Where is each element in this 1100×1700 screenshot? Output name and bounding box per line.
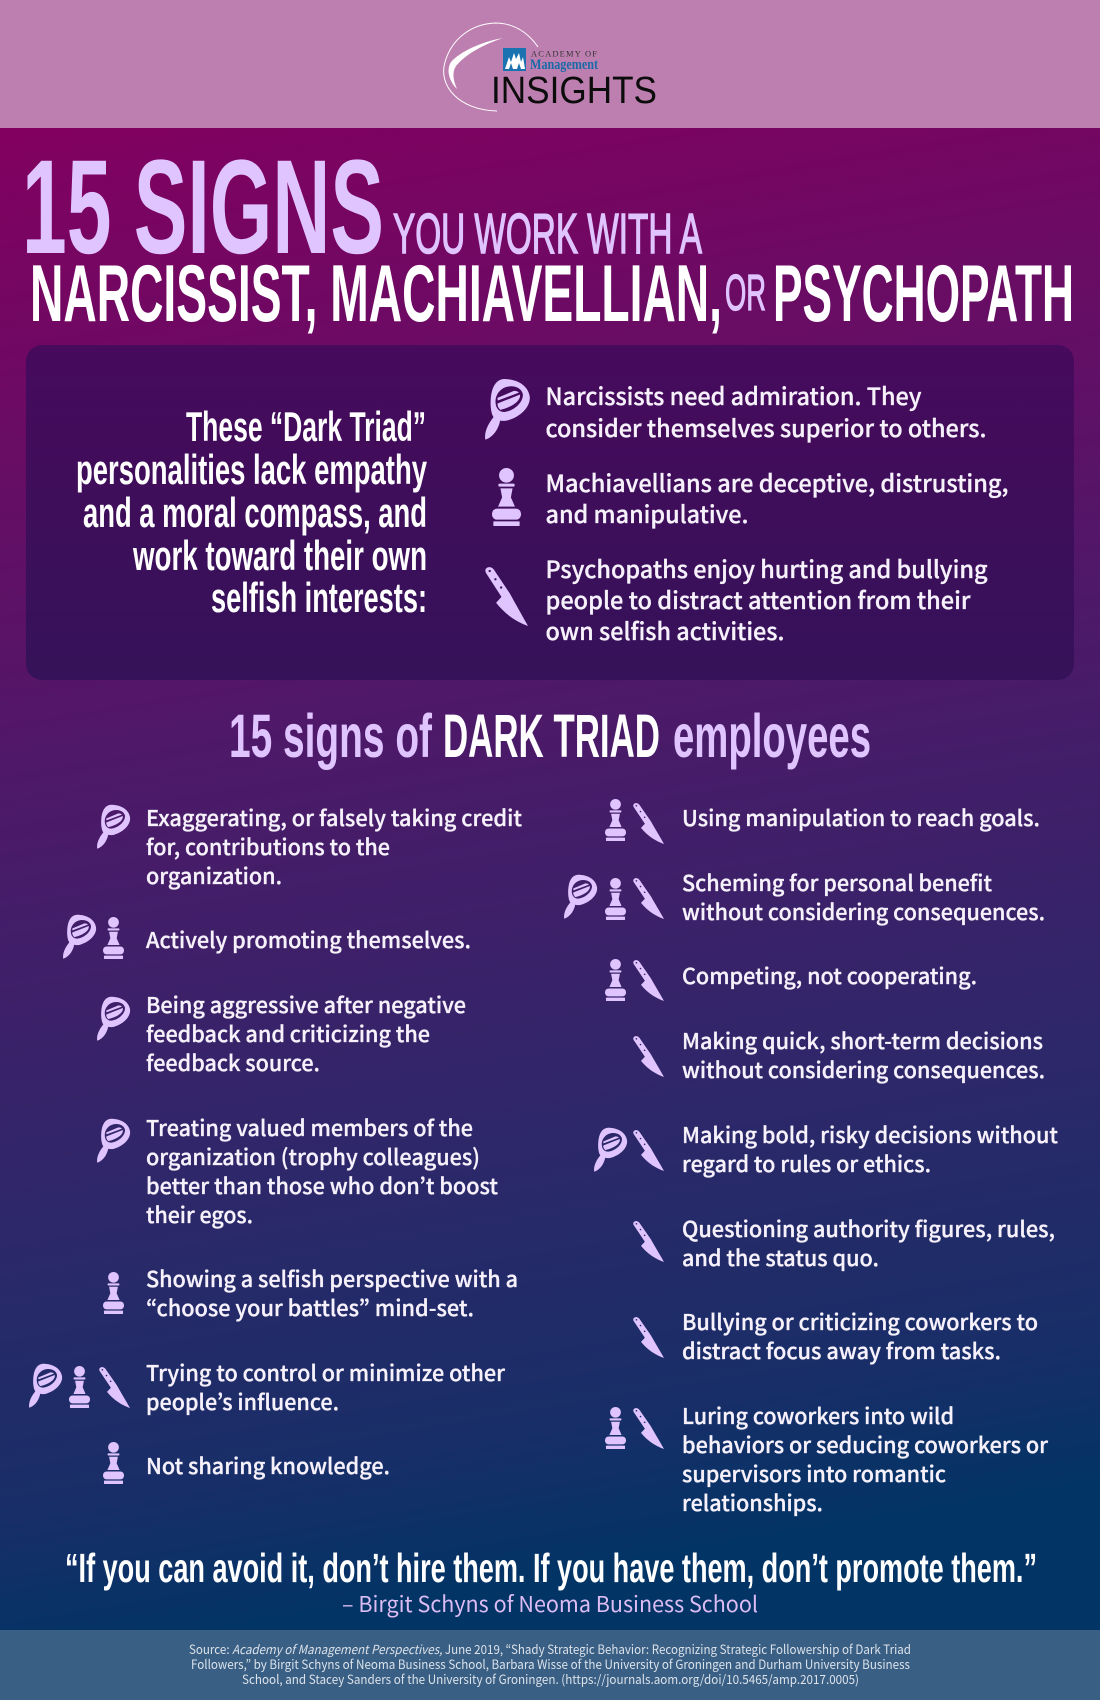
panel intro text: These “Dark Triad” (186, 403, 426, 450)
sign 4: better than those who don’t boost (146, 1169, 498, 1201)
sign 6: people’s influence. (146, 1385, 339, 1417)
section heading: 15 signs of (229, 702, 432, 770)
sign 14: distract focus away from tasks. (682, 1334, 1001, 1366)
panel intro text: work toward their own (132, 532, 427, 579)
sign 8: Using manipulation to reach goals. (682, 801, 1040, 833)
source citation: Source: Academy of Management Perspectives, June 2019, “Shady Strategic Behavior: Recognizing Strategic Followership of Dark Triad (189, 1639, 911, 1658)
sign 5 (103, 1262, 518, 1323)
title (22, 133, 1074, 339)
sign 3 (97, 988, 466, 1078)
sign 1: for, contributions to the (146, 830, 390, 862)
sign 4 (97, 1111, 498, 1230)
footer source band (0, 1630, 1100, 1700)
sign 2: Actively promoting themselves. (146, 923, 471, 955)
sign 12: regard to rules or ethics. (682, 1147, 931, 1179)
sign 6: Trying to control or minimize other (146, 1356, 506, 1388)
sign 15: Luring coworkers into wild (682, 1399, 954, 1431)
panel intro text: selfish interests: (211, 574, 427, 621)
sign 7 (103, 1442, 390, 1484)
source citation: Followers,” by Birgit Schyns of Neoma Business School, Barbara Wisse of the University of Groningen and Durham University Business (191, 1654, 910, 1673)
machiavellians definition: Machiavellians are deceptive, distrusting, (546, 464, 1008, 499)
sign 6 (29, 1356, 506, 1417)
sign 12 (594, 1118, 1058, 1179)
title: YOU WORK WITH A (393, 202, 702, 266)
section heading (229, 702, 871, 770)
sign 9: Scheming for personal benefit (682, 866, 992, 898)
sign 13 (633, 1212, 1055, 1273)
sign 1 (97, 801, 522, 891)
psychopaths definition: own selfish activities. (546, 612, 784, 647)
source citation (189, 1639, 911, 1688)
panel: dark triad definitions (26, 345, 1074, 680)
psychopaths definition: Psychopaths enjoy hurting and bullying (546, 550, 988, 585)
sign 10 (605, 959, 977, 1001)
title: 15 SIGNS (22, 133, 384, 282)
sign 15 (605, 1399, 1049, 1518)
panel intro text: personalities lack empathy (76, 446, 427, 493)
list: left column signs (29, 801, 522, 1484)
icon: knife (485, 567, 528, 626)
section heading: DARK TRIAD (443, 702, 660, 770)
psychopaths definition: people to distract attention from their (546, 581, 971, 616)
section heading: employees (673, 702, 871, 770)
sign 8 (605, 799, 1040, 844)
psychopaths definition (546, 550, 988, 647)
title: OR (725, 264, 766, 321)
logo: Academy of Management Insights (444, 23, 657, 112)
sign 3: feedback source. (146, 1046, 320, 1078)
sign 11 (633, 1024, 1045, 1085)
list: right column signs (564, 799, 1058, 1518)
sign 13: Questioning authority figures, rules, (682, 1212, 1055, 1244)
sign 4: their egos. (146, 1198, 253, 1230)
sign 15: relationships. (682, 1486, 823, 1518)
sign 3: feedback and criticizing the (146, 1017, 430, 1049)
sign 4: organization (trophy colleagues) (146, 1140, 480, 1172)
narcissists definition: consider themselves superior to others. (546, 409, 986, 444)
sign 9 (564, 866, 1045, 927)
icon: mirror (485, 379, 530, 440)
machiavellians definition (546, 464, 1008, 530)
sign 11: Making quick, short-term decisions (682, 1024, 1043, 1056)
narcissists definition (546, 377, 986, 444)
sign 2 (63, 915, 471, 959)
machiavellians definition: and manipulative. (546, 495, 748, 530)
sign 7: Not sharing knowledge. (146, 1449, 390, 1481)
sign 9: without considering consequences. (682, 895, 1045, 927)
sign 14: Bullying or criticizing coworkers to (682, 1305, 1038, 1337)
sign 5: Showing a selfish perspective with a (146, 1262, 518, 1294)
sign 11: without considering consequences. (682, 1053, 1045, 1085)
sign 1: Exaggerating, or falsely taking credit (146, 801, 522, 833)
panel intro text: and a moral compass, and (83, 489, 427, 536)
sign 15: behaviors or seducing coworkers or (682, 1428, 1049, 1460)
logo: Academy of Management Insights: INSIGHTS (491, 70, 657, 112)
sign 15: supervisors into romantic (682, 1457, 946, 1489)
panel intro text (76, 403, 427, 621)
logo: Academy of Management Insights: ACADEMY OF (531, 48, 597, 58)
narcissists definition: Narcissists need admiration. They (546, 377, 922, 412)
quote attribution: – Birgit Schyns of Neoma Business School (342, 1587, 758, 1619)
sign 4: Treating valued members of the (146, 1111, 473, 1143)
sign 12: Making bold, risky decisions without (682, 1118, 1058, 1150)
sign 1: organization. (146, 859, 282, 891)
icon: pawn (492, 468, 521, 526)
sign 13: and the status quo. (682, 1241, 879, 1273)
sign 14 (633, 1305, 1038, 1366)
sign 10: Competing, not cooperating. (682, 959, 977, 991)
sign 3: Being aggressive after negative (146, 988, 466, 1020)
logo: Academy of Management Insights: Management (530, 57, 598, 73)
sign 5: “choose your battles” mind-set. (146, 1291, 474, 1323)
header band with logo (0, 0, 1100, 128)
source citation: School, and Stacey Sanders of the University of Groningen. (https://journals.aom.org/doi/10.5465/amp.2017.0005) (242, 1669, 859, 1688)
